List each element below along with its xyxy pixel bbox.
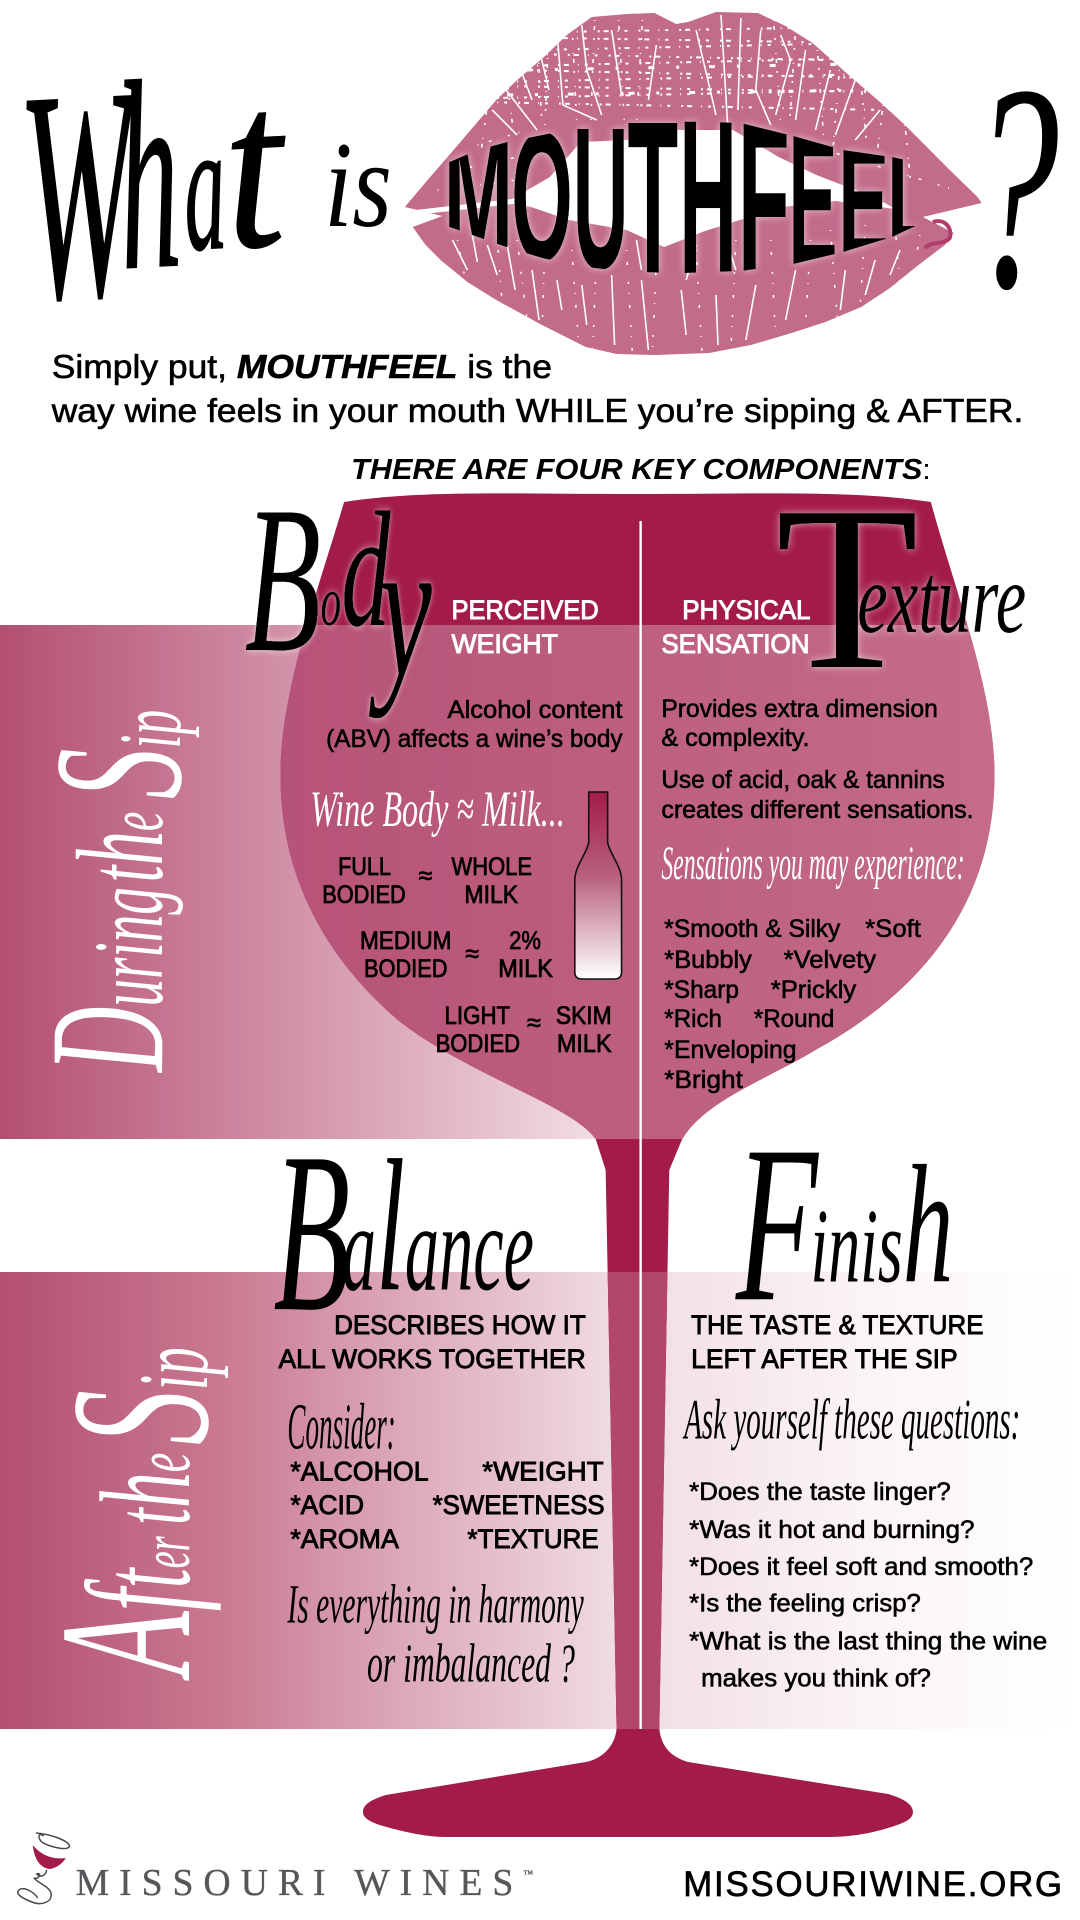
MOUTHFEEL word	[444, 117, 916, 278]
side label: after the sip: ip	[119, 1347, 229, 1390]
sensations list: *Bubbly	[664, 946, 752, 974]
heading: Body: o	[320, 564, 341, 641]
question list: *Does the taste linger?	[689, 1478, 951, 1506]
heading: Body: y	[369, 496, 433, 719]
body description: (ABV) affects a wine’s body	[326, 725, 623, 753]
texture subtitle: SENSATION	[661, 629, 810, 659]
balance factors	[290, 1456, 605, 1554]
sensations list: *Bright	[664, 1066, 743, 1094]
balance factors: *WEIGHT	[482, 1456, 604, 1486]
sensations list: *Enveloping	[664, 1036, 797, 1064]
band: after the sip	[0, 1272, 1080, 1729]
body subtitle: WEIGHT	[451, 629, 558, 659]
mouth opening	[398, 130, 895, 247]
balance factors: *ALCOHOL	[290, 1456, 429, 1486]
comparison: light bodied: LIGHT	[445, 1002, 510, 1030]
heading: Balance: B	[273, 1105, 350, 1359]
question list: *Is the feeling crisp?	[689, 1590, 921, 1618]
side label: during the sip: he	[51, 812, 189, 865]
side label: after the sip: t	[92, 1506, 214, 1525]
balance factors: *SWEETNESS	[433, 1490, 605, 1520]
comparison: medium bodied: MEDIUM	[360, 927, 451, 955]
finish subtitle: LEFT AFTER THE SIP	[691, 1344, 958, 1374]
texture description: creates different sensations.	[661, 796, 974, 824]
heading: Finish: h	[903, 1132, 953, 1319]
balance factors: *AROMA	[290, 1524, 399, 1554]
title: What is	[14, 18, 392, 364]
MOUTHFEEL word: T	[628, 76, 678, 319]
side label: during the sip: t	[66, 864, 187, 882]
texture description: & complexity.	[661, 724, 810, 752]
wine glass	[269, 485, 1004, 1845]
texture description: Use of acid, oak & tannins	[661, 766, 945, 794]
body subtitle: PERCEIVED	[451, 595, 599, 625]
texture description	[661, 695, 974, 824]
band: during the sip	[0, 625, 597, 1139]
question list	[689, 1478, 1047, 1692]
texture subtitle	[661, 595, 811, 659]
heading: Balance: lance	[376, 1121, 534, 1330]
title: question mark: ?	[970, 25, 1059, 351]
body description: Alcohol content	[448, 696, 623, 724]
sensations list	[664, 915, 921, 1094]
intro text: Simply put, MOUTHFEEL is the	[52, 348, 552, 385]
sensations list: *Soft	[865, 915, 921, 943]
comparison: full bodied: MILK	[464, 881, 518, 909]
MOUTHFEEL word: H	[679, 75, 737, 321]
MOUTHFEEL word: L	[887, 127, 933, 267]
question list: *Was it hot and burning?	[689, 1516, 975, 1544]
MOUTHFEEL word: O	[511, 95, 573, 300]
script: harmony question: or imbalanced ?	[367, 1633, 575, 1694]
icon: wine bottle	[575, 792, 622, 979]
comparison: medium bodied	[360, 927, 553, 983]
comparison: full bodied: FULL	[338, 853, 391, 881]
lip texture cracks	[438, 15, 955, 355]
question list: makes you think of?	[701, 1664, 931, 1692]
intro text: way wine feels in your mouth WHILE you’re sipping & AFTER.	[51, 392, 1023, 429]
comparison: light bodied: BODIED	[436, 1030, 520, 1058]
sensations list: *Prickly	[771, 976, 857, 1004]
intro text	[51, 348, 1023, 429]
comparison: full bodied	[322, 853, 532, 909]
comparison: full bodied: ≈	[419, 862, 432, 890]
side label: during the sip: During	[16, 887, 198, 1072]
sensations list: *Smooth & Silky	[664, 915, 841, 943]
side label: after the sip: After	[22, 1536, 231, 1675]
comparison: light bodied: ≈	[527, 1009, 541, 1037]
balance subtitle: ALL WORKS TOGETHER	[278, 1344, 586, 1374]
panel: balance	[273, 1105, 605, 1694]
red lip smudge	[925, 221, 950, 248]
question list: *What is the last thing the wine	[689, 1627, 1047, 1655]
question list: *Does it feel soft and smooth?	[689, 1553, 1033, 1581]
heading: Finish: F	[735, 1100, 820, 1348]
sensations list: *Round	[754, 1005, 834, 1033]
texture subtitle: PHYSICAL	[682, 595, 811, 625]
comparison: medium bodied: MILK	[498, 955, 553, 983]
wordmark: Missouri Wines: MISSOURI WINES	[76, 1862, 513, 1904]
heading: Body: d	[341, 479, 391, 661]
comparison: light bodied: SKIM	[556, 1002, 612, 1030]
title: What is: W	[14, 26, 154, 364]
heading: Balance: a	[342, 1179, 376, 1317]
balance subtitle: DESCRIBES HOW IT	[334, 1310, 586, 1340]
side label: during the sip: ip	[101, 710, 200, 748]
MOUTHFEEL word: F	[738, 79, 790, 317]
balance subtitle	[278, 1310, 586, 1374]
side label: during the sip: S	[18, 748, 221, 799]
body subtitle	[451, 595, 599, 659]
finish subtitle: THE TASTE & TEXTURE	[691, 1310, 984, 1340]
script: consider: Consider:	[287, 1391, 396, 1464]
texture description: Provides extra dimension	[661, 695, 938, 723]
script: wine body milk: Wine Body ≈ Milk...	[310, 780, 565, 837]
MOUTHFEEL word: M	[444, 107, 513, 280]
comparison: full bodied: WHOLE	[451, 853, 532, 881]
MOUTHFEEL word: U	[573, 85, 629, 311]
title: What is: h	[110, 26, 186, 327]
heading: Texture: T	[776, 457, 918, 718]
icon: wine glass logo	[18, 1833, 70, 1904]
website url: MISSOURIWINE.ORG	[683, 1865, 1062, 1904]
sensations list: *Rich	[664, 1005, 722, 1033]
comparison: light bodied	[436, 1002, 612, 1058]
sensations list: *Sharp	[664, 976, 739, 1004]
sensations list: *Velvety	[784, 946, 877, 974]
MOUTHFEEL word: E	[789, 96, 837, 307]
lips	[398, 5, 994, 360]
comparison: medium bodied: BODIED	[364, 955, 448, 983]
MOUTHFEEL word: E	[838, 112, 889, 291]
balance factors: *TEXTURE	[467, 1524, 599, 1554]
side label: after the sip: he	[74, 1453, 217, 1508]
panel: finish	[682, 1100, 1047, 1692]
footer logo	[18, 1833, 533, 1904]
comparison: full bodied: BODIED	[322, 881, 406, 909]
comparison: medium bodied: 2%	[509, 927, 541, 955]
title: What is: t	[217, 37, 294, 299]
wordmark: Missouri Wines: ™	[523, 1869, 533, 1880]
balance factors: *ACID	[290, 1490, 364, 1520]
script: sensations: Sensations you may experience:	[661, 836, 965, 889]
script: harmony question: Is everything in harmony	[287, 1574, 584, 1636]
panel: texture	[661, 457, 1026, 1094]
heading: Body: B	[245, 464, 321, 696]
side label: after the sip: S	[30, 1390, 250, 1445]
comparison: light bodied: MILK	[557, 1030, 612, 1058]
script: harmony question	[287, 1574, 584, 1694]
subheading: THERE ARE FOUR KEY COMPONENTS :	[351, 454, 931, 486]
heading: Finish: inis	[810, 1187, 903, 1304]
body description	[326, 696, 623, 753]
panel: body	[245, 464, 623, 1058]
title: What is: a	[178, 82, 230, 290]
title: What is: is	[324, 116, 392, 253]
finish subtitle	[691, 1310, 984, 1374]
comparison: medium bodied: ≈	[465, 940, 479, 968]
